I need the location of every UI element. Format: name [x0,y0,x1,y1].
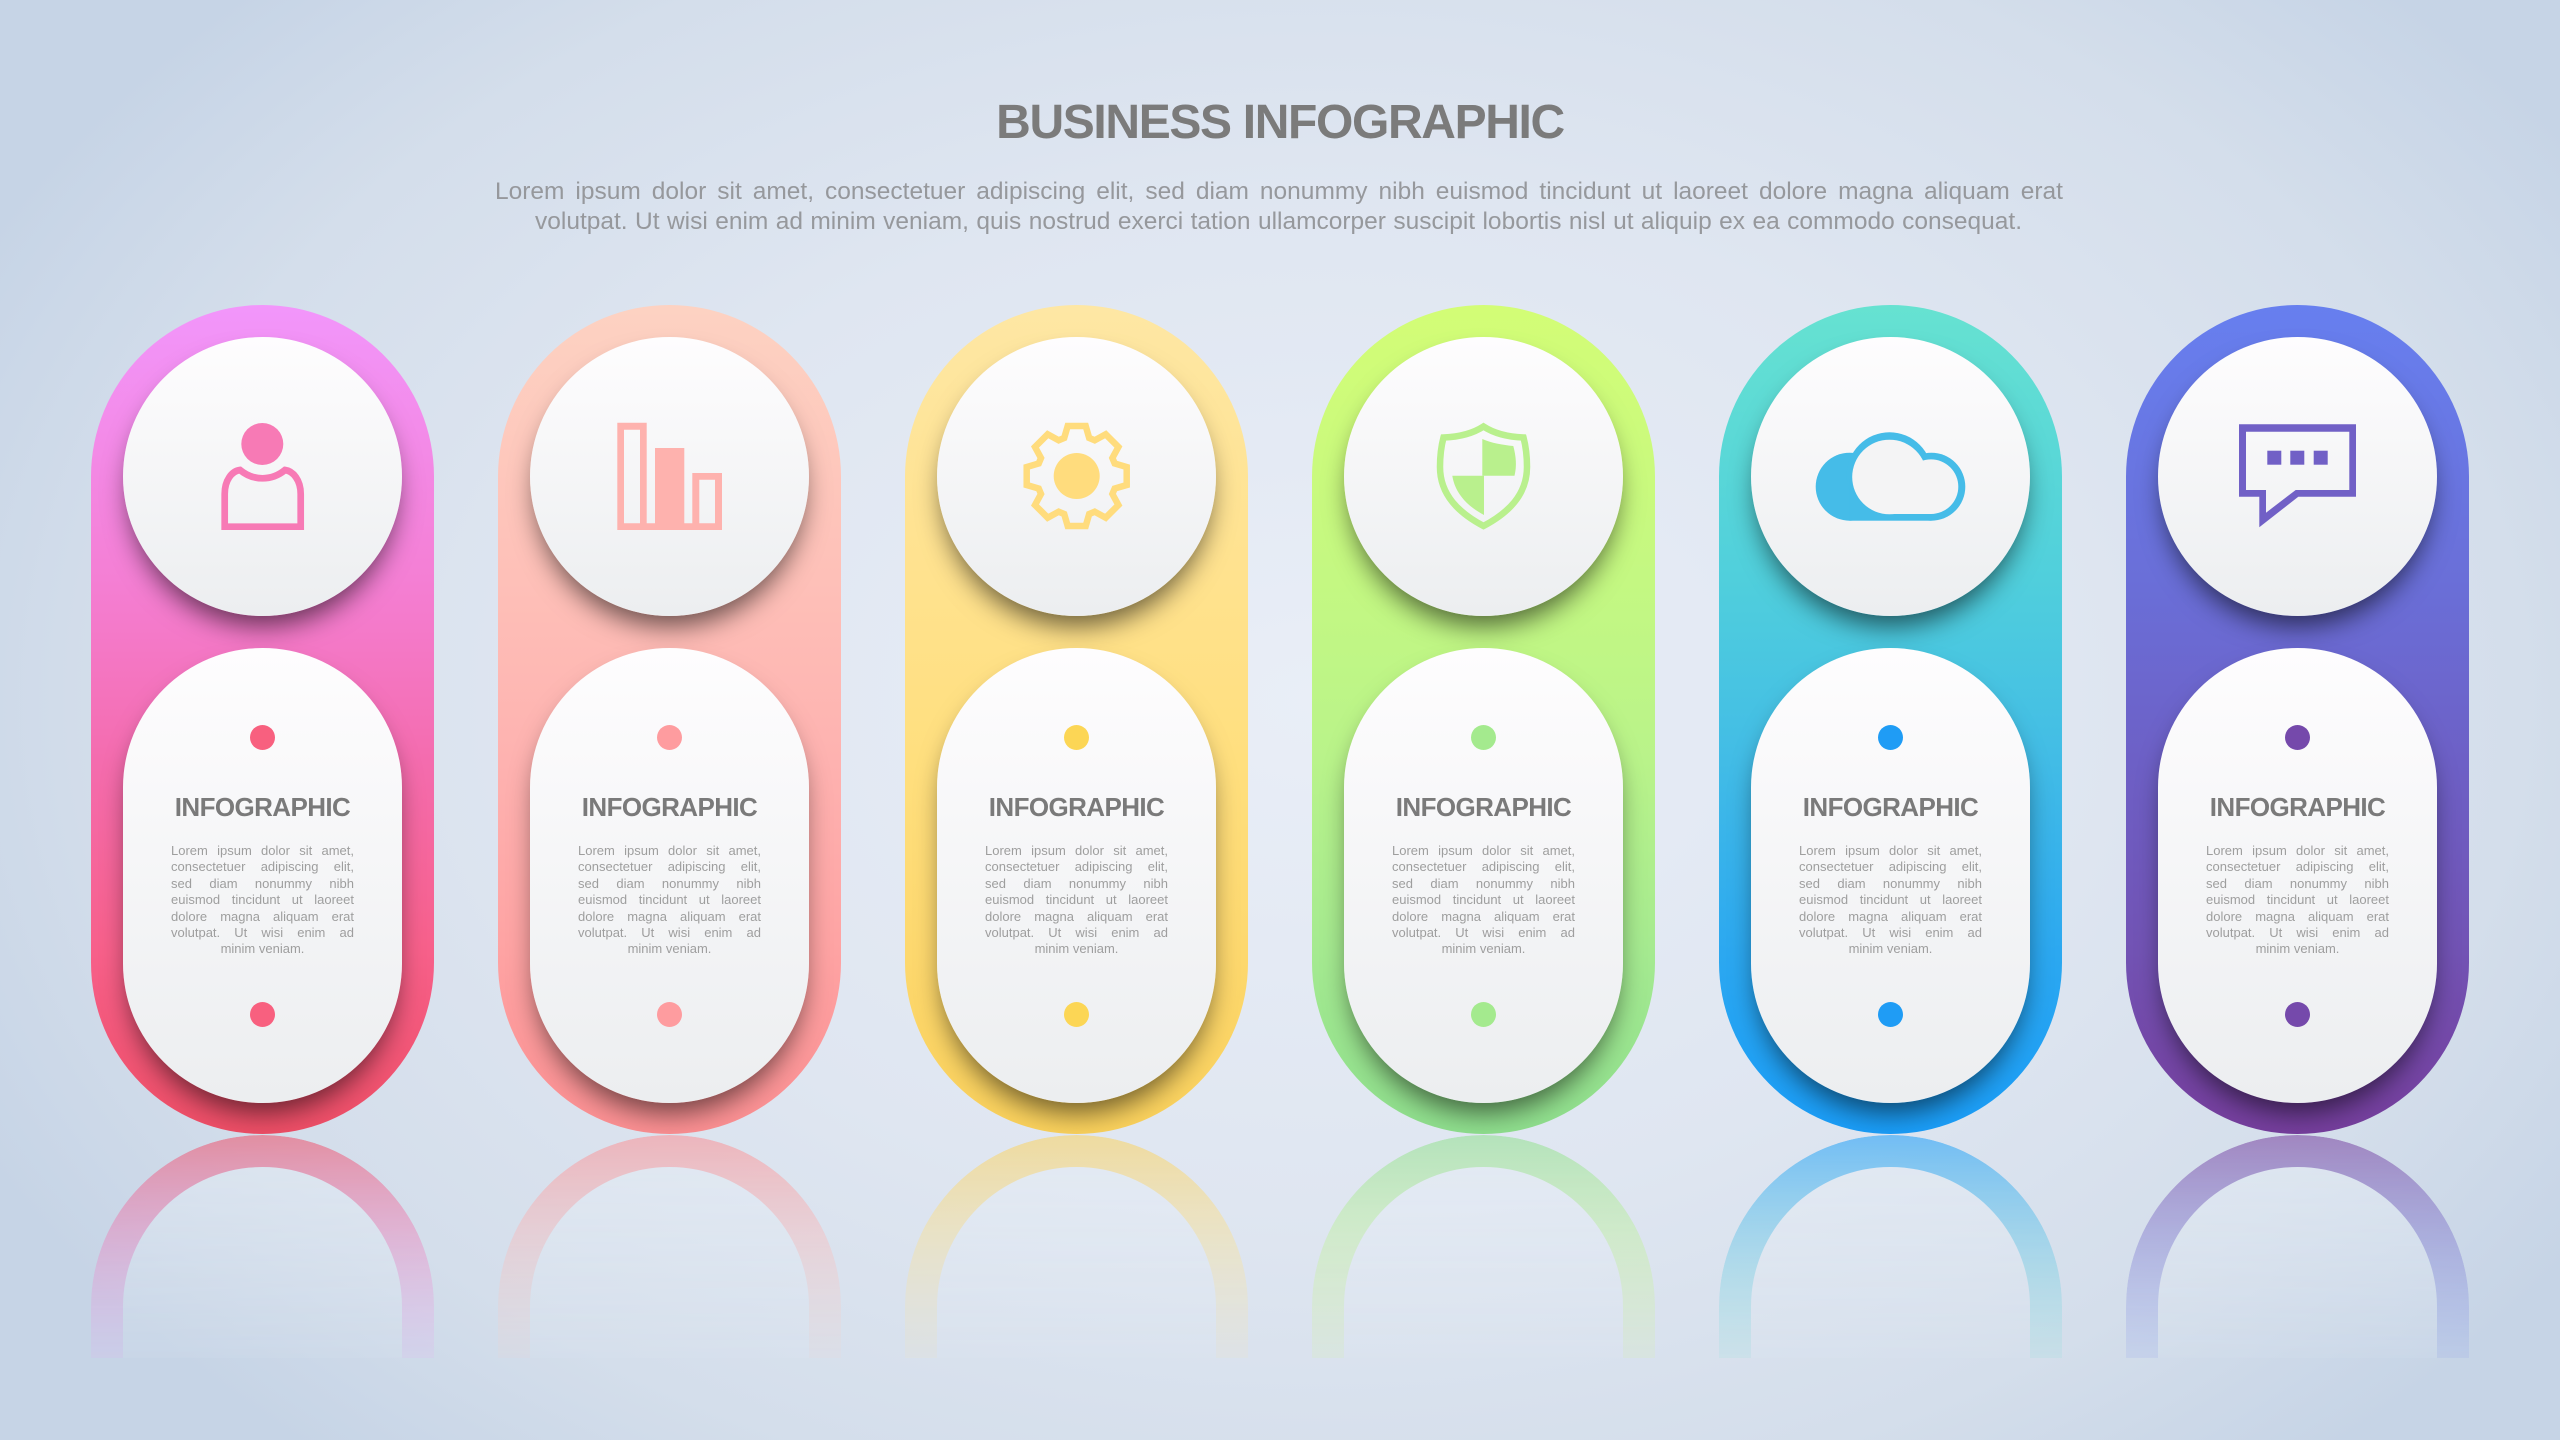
card body text: euismod tincidunt ut laoreet [578,892,761,907]
card body text: consectetuer adipiscing elit, [1799,859,1982,874]
text card [2158,648,2437,1103]
text card [530,648,809,1103]
bottom dot [657,1002,682,1026]
subtitle text block: volutpat. Ut wisi enim ad minim veniam, quis nostrud exerci tation ullamcorper suscipit lobortis nisl ut aliquip ex ea commodo consequat. [535,208,2022,235]
card body text: euismod tincidunt ut laoreet [1799,892,1982,907]
card body text: Lorem ipsum dolor sit amet, [985,843,1168,858]
card body text [1392,843,1575,956]
card body text: minim veniam. [628,941,711,956]
top dot [1064,724,1089,750]
card heading: INFOGRAPHIC [582,792,757,822]
card body text: euismod tincidunt ut laoreet [985,892,1168,907]
card body text [171,843,354,956]
icon: person [221,423,304,530]
bottom dot [1471,1002,1496,1026]
card body text: volutpat. Ut wisi enim ad [1799,925,1982,940]
card body text: euismod tincidunt ut laoreet [1392,892,1575,907]
card body text: sed diam nonummy nibh [985,876,1168,891]
card body text [578,843,761,956]
panel: step 4 green [1312,305,1655,1134]
top dot [1471,724,1496,750]
card body text: volutpat. Ut wisi enim ad [1392,925,1575,940]
card body text: consectetuer adipiscing elit, [171,859,354,874]
top dot [2285,724,2310,750]
card body text: consectetuer adipiscing elit, [1392,859,1575,874]
subtitle text block [495,178,2063,235]
top dot [250,724,275,750]
title: BUSINESS INFOGRAPHIC [996,96,1564,149]
card body text: sed diam nonummy nibh [1799,876,1982,891]
icon: cloud [1816,432,1966,521]
card body text: euismod tincidunt ut laoreet [171,892,354,907]
card body text: volutpat. Ut wisi enim ad [2206,925,2389,940]
reflection: step 4 [1312,1135,1655,1358]
card body text: volutpat. Ut wisi enim ad [578,925,761,940]
card body text: euismod tincidunt ut laoreet [2206,892,2389,907]
reflection: step 2 [498,1135,841,1328]
bottom dot [2285,1002,2310,1026]
icon circle: bar chart [530,337,809,616]
icon circle: gear [937,337,1216,616]
card heading: INFOGRAPHIC [989,792,1164,822]
panel: step 6 purple [2126,305,2469,1134]
card body text: volutpat. Ut wisi enim ad [171,925,354,940]
card heading: INFOGRAPHIC [175,792,350,822]
card body text: Lorem ipsum dolor sit amet, [1392,843,1575,858]
card body text: sed diam nonummy nibh [171,876,354,891]
panel: step 3 yellow [905,305,1248,1134]
card body text: dolore magna aliquam erat [1392,909,1575,924]
card heading: INFOGRAPHIC [1396,792,1571,822]
panel: step 2 salmon [498,305,841,1134]
card heading: INFOGRAPHIC [2210,792,2385,822]
text card [937,648,1216,1103]
bottom dot [250,1002,275,1026]
bottom dot [1064,1002,1089,1026]
icon: gear [1023,422,1130,530]
card body text: Lorem ipsum dolor sit amet, [1799,843,1982,858]
card body text [2206,843,2389,956]
card body text: Lorem ipsum dolor sit amet, [2206,843,2389,858]
text card [1751,648,2030,1103]
card body text [985,843,1168,956]
top dot [1878,724,1903,750]
card body text: volutpat. Ut wisi enim ad [985,925,1168,940]
icon circle: shield [1344,337,1623,616]
reflection: step 3 [905,1135,1248,1358]
card body text: dolore magna aliquam erat [2206,909,2389,924]
card body text: minim veniam. [1035,941,1118,956]
reflection: step 1 [91,1135,434,1358]
card body text: Lorem ipsum dolor sit amet, [171,843,354,858]
reflection: step 6 [2126,1135,2469,1358]
card body text: sed diam nonummy nibh [2206,876,2389,891]
icon circle: cloud [1751,337,2030,616]
panel: step 5 blue [1719,305,2062,1134]
card body text: dolore magna aliquam erat [1799,909,1982,924]
panel: step 1 pink [91,305,434,1134]
icon: speech bubble [2239,424,2356,528]
card body text: Lorem ipsum dolor sit amet, [578,843,761,858]
card body text: consectetuer adipiscing elit, [985,859,1168,874]
card body text: sed diam nonummy nibh [1392,876,1575,891]
reflection: step 5 [1719,1135,2062,1358]
top dot [657,724,682,750]
text card [123,648,402,1103]
bottom dot [1878,1002,1903,1026]
text card [1344,648,1623,1103]
card body text: consectetuer adipiscing elit, [2206,859,2389,874]
subtitle text block: Lorem ipsum dolor sit amet, consectetuer adipiscing elit, sed diam nonummy nibh euismod tincidunt ut laoreet dolore magna aliquam erat [495,178,2063,205]
icon circle: person [123,337,402,616]
card body text [1799,843,1982,956]
card body text: dolore magna aliquam erat [171,909,354,924]
card body text: minim veniam. [2256,941,2339,956]
icon: bar chart [617,422,722,530]
card body text: minim veniam. [1442,941,1525,956]
card body text: dolore magna aliquam erat [985,909,1168,924]
icon: shield [1436,422,1530,530]
card body text: minim veniam. [1849,941,1932,956]
icon circle: speech bubble [2158,337,2437,616]
card body text: consectetuer adipiscing elit, [578,859,761,874]
card heading: INFOGRAPHIC [1803,792,1978,822]
card body text: sed diam nonummy nibh [578,876,761,891]
card body text: dolore magna aliquam erat [578,909,761,924]
card body text: minim veniam. [221,941,304,956]
